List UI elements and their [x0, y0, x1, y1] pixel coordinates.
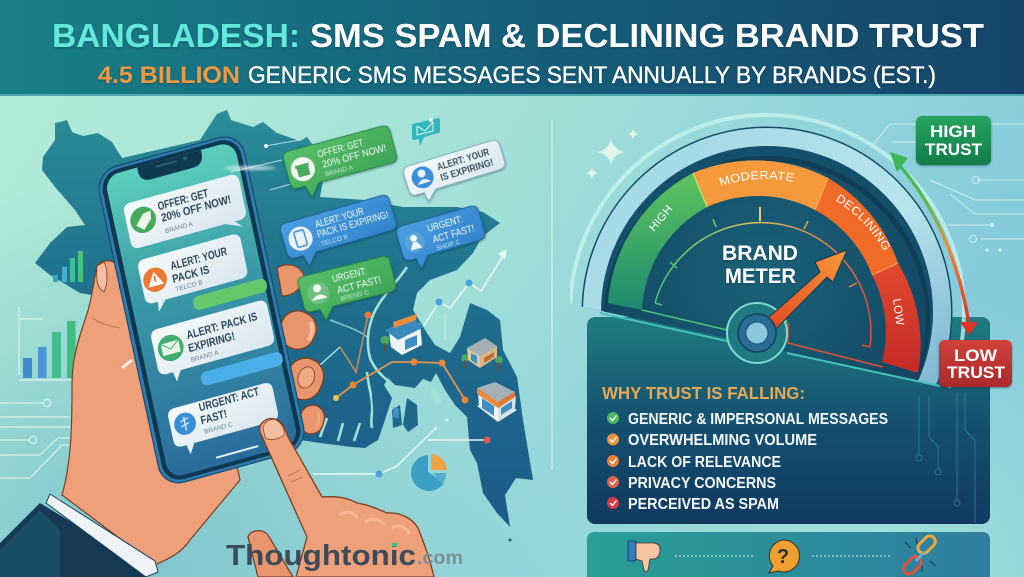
title	[52, 17, 984, 54]
badge: high trust	[916, 116, 991, 165]
outer glow arc	[570, 113, 966, 388]
message: white alert bubble: IS EXPIRING!	[439, 157, 495, 184]
message: green offer bubble: BRAND A	[324, 164, 354, 178]
finger 3	[281, 353, 329, 405]
holding hand	[0, 261, 329, 577]
item 5: PERCEIVED AS SPAM	[628, 496, 779, 513]
hub base	[727, 303, 787, 363]
pointing hand	[248, 419, 434, 577]
panel: why trust is falling	[587, 317, 990, 524]
gauge labels	[647, 171, 905, 326]
icon: question bubble	[769, 540, 800, 573]
gauge labels: LOW	[890, 298, 905, 326]
message: alert pack: PACK IS	[171, 264, 211, 286]
gauge title: METER	[725, 265, 796, 288]
message: blue alert bubble: ALERT: YOUR	[314, 205, 365, 231]
trust direction arrow	[890, 152, 978, 335]
delta islands	[372, 392, 418, 432]
finger 4	[297, 402, 327, 437]
background chart and circuit lines	[0, 307, 90, 478]
message: urgent: URGENT: ACT	[198, 386, 260, 414]
finger 1	[277, 265, 304, 296]
smartphone	[95, 132, 308, 488]
gauge title: BRAND	[722, 242, 798, 265]
segment: high	[608, 173, 707, 310]
message: blue alert bubble: TELCO B	[320, 234, 349, 248]
message: blue urgent bubble: URGENT:	[426, 213, 464, 235]
title: BANGLADESH:	[52, 17, 300, 54]
home indicator	[216, 445, 259, 459]
item 2: OVERWHELMING VOLUME	[628, 432, 817, 449]
icon: shop 2	[461, 338, 503, 370]
message: pack expiring: EXPIRING!	[187, 331, 236, 355]
badge: high trust: TRUST	[925, 140, 983, 159]
message: alert pack	[137, 233, 251, 315]
hub	[738, 314, 776, 352]
icon: shop 3	[477, 382, 517, 422]
message: blue urgent bubble	[395, 205, 490, 273]
title: SMS SPAM & DECLINING BRAND TRUST	[310, 17, 984, 54]
gauge labels: DECLINING	[836, 194, 890, 250]
network line charts on map	[313, 249, 507, 478]
jacket sleeve	[0, 503, 150, 577]
right side circuit lines	[870, 124, 1024, 251]
segment dividers	[693, 173, 707, 207]
message: green urgent bubble	[297, 255, 400, 325]
message: offer: BRAND A	[165, 221, 194, 235]
message: blue alert bubble	[279, 194, 401, 271]
map of Bangladesh	[35, 110, 533, 542]
pie chart icon	[411, 454, 447, 491]
segment: moderate	[693, 160, 828, 210]
message: blue urgent bubble: ACT FAST!	[431, 222, 476, 246]
gauge labels: HIGH	[647, 203, 676, 234]
message: green offer bubble	[282, 125, 401, 201]
message: white alert bubble: ALERT: YOUR	[436, 147, 491, 173]
dotted connector	[675, 555, 753, 557]
message: pack expiring	[150, 299, 278, 386]
notch	[137, 150, 204, 182]
item 4: PRIVACY CONCERNS	[628, 475, 776, 492]
watermark: Thoughtonic	[226, 540, 416, 572]
message: offer	[123, 173, 249, 257]
message: white alert bubble	[402, 139, 509, 206]
message: green urgent bubble: BREND C	[340, 289, 370, 303]
icon: shop 1	[380, 314, 424, 418]
palm and thumb	[62, 261, 240, 565]
base edge	[600, 313, 940, 386]
message: urgent	[167, 381, 282, 458]
subtitle: GENERIC SMS MESSAGES SENT ANNUALLY BY BRANDS (EST.)	[248, 62, 936, 89]
tick scale	[642, 207, 883, 367]
panel: icon strip	[587, 532, 990, 577]
message: green offer bubble: 20% OFF NOW!	[321, 142, 388, 171]
icon: question bubble: ?	[777, 546, 789, 568]
icon: floating mail bubble	[412, 118, 440, 146]
sparkle icons	[586, 129, 638, 179]
badge: high trust: HIGH	[930, 122, 976, 141]
message: blue urgent bubble: SHOP C	[435, 239, 461, 252]
message: green offer bubble: OFFER: GET	[316, 137, 365, 161]
item 1: GENERIC & IMPERSONAL MESSAGES	[628, 411, 888, 428]
message: pack expiring: ALERT: PACK IS	[185, 311, 259, 342]
blue reply pill	[200, 351, 284, 387]
watermark: .com	[417, 548, 463, 569]
message: alert pack: ALERT: YOUR	[170, 246, 229, 273]
message: offer: 20% OFF NOW!	[160, 194, 232, 225]
segment: declining	[815, 178, 898, 275]
gauge title	[722, 242, 798, 288]
heading: WHY TRUST IS FALLING:	[602, 383, 805, 403]
shirt cuff	[46, 494, 158, 577]
message: urgent: BRAND C	[204, 421, 234, 436]
badge: low trust	[939, 340, 1012, 387]
badge: low trust: TRUST	[947, 363, 1006, 382]
light streak	[224, 140, 340, 190]
brand meter gauge	[570, 113, 966, 388]
gauge labels: MODERATE	[719, 171, 794, 186]
finger 2	[273, 305, 322, 355]
subtitle: 4.5 BILLION	[98, 62, 240, 89]
small bars on map	[53, 251, 83, 282]
message: urgent: FAST!	[200, 408, 228, 427]
message: green urgent bubble: URGENT:	[331, 265, 368, 285]
message: offer: OFFER: GET	[157, 188, 209, 213]
badge: low trust: LOW	[954, 346, 998, 365]
message: pack expiring: BRAND A	[190, 349, 220, 364]
message: blue alert bubble: PACK IS EXPIRING!	[316, 209, 390, 241]
vertical divider	[551, 120, 553, 470]
green reply pill	[192, 277, 268, 311]
item 3: LACK OF RELEVANCE	[628, 454, 781, 471]
message: green urgent bubble: ACT FAST!	[336, 274, 382, 296]
dotted connector	[812, 555, 890, 557]
message: alert pack: TELCO B	[175, 279, 203, 294]
segment: low	[872, 263, 921, 373]
needle	[760, 250, 847, 337]
header banner	[0, 0, 1024, 96]
icon: broken chain	[901, 534, 938, 576]
icon: thumbs down	[628, 541, 660, 572]
